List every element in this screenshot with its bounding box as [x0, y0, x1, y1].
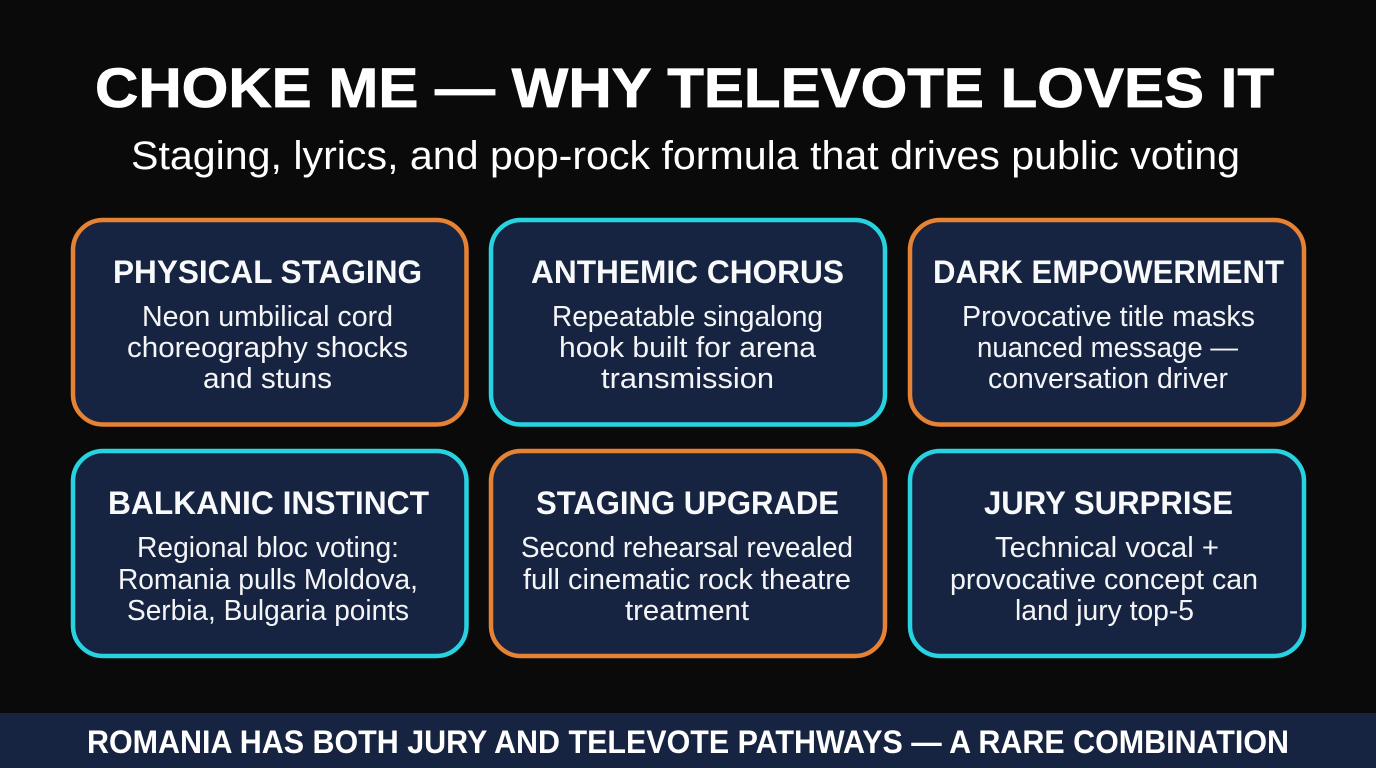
- text: staging upgrade description: full cinematic rock theatre: [523, 564, 851, 596]
- heading: jury surprise: JURY SURPRISE: [984, 485, 1233, 521]
- panel: staging upgrade: [491, 451, 885, 656]
- text: staging upgrade description: Second rehearsal revealed: [521, 532, 853, 564]
- text: physical staging description: Neon umbilical cord: [142, 301, 393, 333]
- text: anthemic chorus description: [552, 301, 823, 395]
- text: jury surprise description: Technical vocal +: [995, 532, 1219, 564]
- panel: balkanic instinct: [73, 451, 466, 656]
- text: dark empowerment description: conversation driver: [988, 363, 1229, 395]
- text: balkanic instinct description: [118, 532, 418, 627]
- heading: balkanic instinct: BALKANIC INSTINCT: [108, 485, 429, 521]
- text: dark empowerment description: [962, 301, 1255, 395]
- text: anthemic chorus description: Repeatable singalong: [552, 301, 823, 333]
- title: CHOKE ME — WHY TELEVOTE LOVES IT: [95, 56, 1274, 119]
- text: staging upgrade description: treatment: [625, 595, 749, 627]
- heading: dark empowerment: DARK EMPOWERMENT: [933, 254, 1284, 290]
- heading: staging upgrade: STAGING UPGRADE: [536, 485, 839, 521]
- text: jury surprise description: provocative concept can: [950, 564, 1258, 596]
- text: physical staging description: [127, 301, 408, 395]
- panel: physical staging: [73, 220, 466, 424]
- text: staging upgrade description: [521, 532, 853, 627]
- text: anthemic chorus description: hook built for arena: [559, 332, 816, 364]
- heading: physical staging: PHYSICAL STAGING: [113, 254, 422, 290]
- text: anthemic chorus description: transmission: [601, 363, 774, 395]
- text: balkanic instinct description: Romania pulls Moldova,: [118, 564, 418, 596]
- panel: dark empowerment: [910, 220, 1304, 424]
- text: physical staging description: choreography shocks: [127, 332, 408, 364]
- text: jury surprise description: land jury top-5: [1015, 595, 1194, 627]
- text: dark empowerment description: Provocative title masks: [962, 301, 1255, 333]
- heading: anthemic chorus: ANTHEMIC CHORUS: [531, 254, 844, 290]
- panel: anthemic chorus: [491, 220, 885, 424]
- text: balkanic instinct description: Regional bloc voting:: [137, 532, 399, 564]
- text: dark empowerment description: nuanced message —: [977, 332, 1238, 364]
- subtitle: Staging, lyrics, and pop-rock formula that drives public voting: [131, 134, 1240, 178]
- banner text: ROMANIA HAS BOTH JURY AND TELEVOTE PATHWAYS — A RARE COMBINATION: [87, 724, 1289, 760]
- text: balkanic instinct description: Serbia, Bulgaria points: [127, 595, 409, 627]
- panel: jury surprise: [910, 451, 1304, 656]
- text: jury surprise description: [950, 532, 1258, 627]
- footer banner: [0, 713, 1376, 768]
- text: physical staging description: and stuns: [203, 363, 332, 395]
